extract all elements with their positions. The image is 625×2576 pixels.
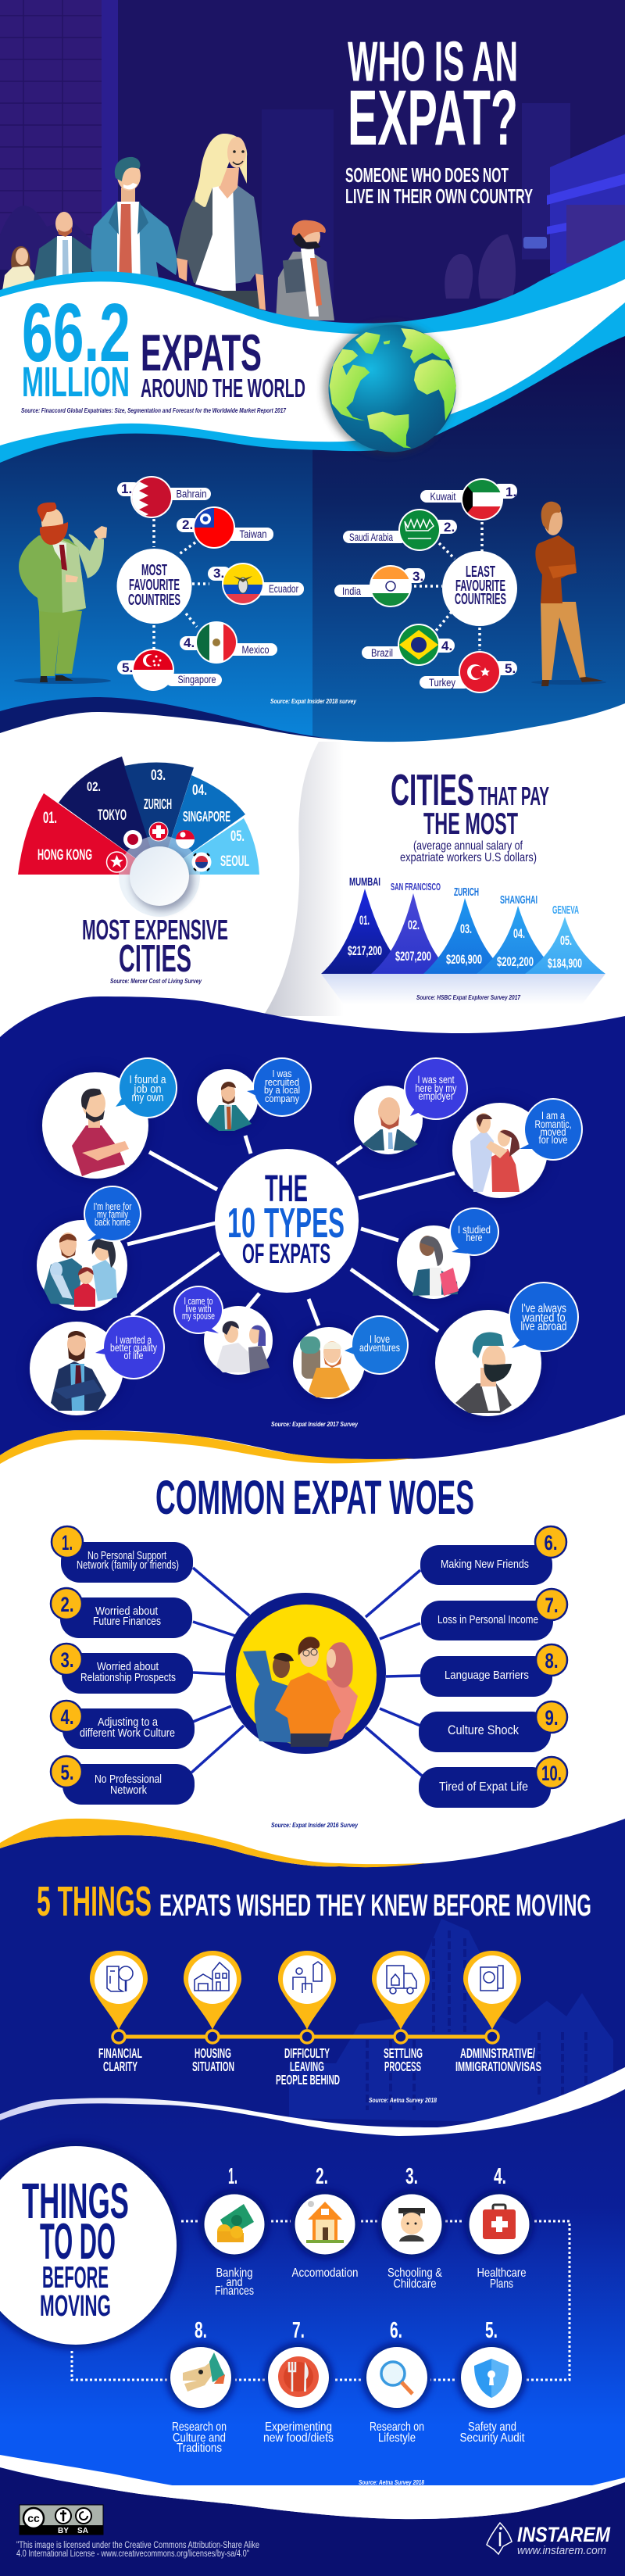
woe labels [77, 1550, 538, 1797]
country: Mexico: 4. [184, 635, 195, 650]
type: romantic [452, 1098, 583, 1198]
woe labels: No Personal Support [88, 1550, 166, 1562]
values: 02. [408, 918, 420, 932]
stat: 66.2 million expats [22, 287, 305, 406]
step labels: and [227, 2276, 242, 2289]
step numbers: 2. [316, 2164, 328, 2189]
woe labels: No Professional [95, 1773, 162, 1786]
type: sent by employer: I was sent [417, 1074, 455, 1086]
country: Taiwan [177, 506, 273, 549]
values: $184,900 [548, 956, 582, 971]
pin labels: IMMIGRATION/VISAS [455, 2059, 541, 2074]
pin labels: ADMINISTRATIVE/ [460, 2045, 535, 2061]
heading circle: COUNTRIES [128, 592, 180, 609]
section background: things to do [0, 2089, 625, 2485]
wave: yellow accent [0, 1430, 414, 1464]
type: recruited: I was [272, 1068, 292, 1079]
heading: 5 things [37, 1878, 591, 1925]
country: Saudi Arabia [343, 509, 457, 551]
country: Kuwait [420, 478, 517, 521]
pin: difficulty leaving people behind [278, 1951, 336, 2043]
source note: Source: Aetna Survey 2018 [369, 2097, 437, 2104]
country: India: India [342, 585, 361, 597]
wave: cyan band [0, 240, 625, 463]
labels [38, 767, 249, 870]
woe numbers: 7. [545, 1594, 558, 1617]
person: man in blue suit [91, 157, 177, 289]
centre dial [119, 835, 200, 917]
woe labels: Making New Friends [441, 1558, 529, 1571]
woe labels: Culture Shock [448, 1723, 519, 1737]
badge: creative commons: cc [27, 2512, 40, 2524]
type: recruited: recruited [265, 1076, 299, 1088]
timeline: 5 things [90, 1951, 541, 2088]
values: 03. [460, 921, 472, 936]
country: Ecuador [208, 563, 304, 605]
country: Turkey: 5. [505, 661, 516, 676]
country: Bahrain: 1. [121, 481, 132, 496]
pin: settling process [372, 1951, 430, 2043]
country: Ecuador: 3. [213, 566, 224, 581]
step numbers: 3. [405, 2164, 418, 2189]
labels: 04. [192, 782, 207, 799]
icon: house [306, 2201, 344, 2243]
flag: Hong Kong [106, 852, 127, 872]
type: family [37, 1186, 141, 1311]
country: Brazil [362, 624, 455, 666]
woe numbers: 2. [61, 1593, 73, 1616]
step labels: Banking [216, 2267, 253, 2280]
type: spouse: I came to [184, 1296, 213, 1307]
woe numbers: 10. [541, 1762, 562, 1785]
woe labels: Adjusting to a [98, 1716, 159, 1729]
logo: instarem [487, 2523, 610, 2557]
step numbers: 7. [292, 2318, 305, 2343]
country: Taiwan: Taiwan [239, 528, 267, 540]
woe labels: Loss in Personal Income [438, 1614, 538, 1626]
step labels: Research on [172, 2420, 227, 2434]
diagram: expat woes [51, 1526, 567, 1808]
person: man with folder [276, 220, 334, 320]
pin labels: CLARITY [103, 2059, 138, 2074]
woe numbers: 8. [545, 1649, 558, 1673]
pin: administrative [463, 1951, 521, 2043]
flag: Switzerland [149, 822, 168, 841]
type: better quality: better quality [110, 1342, 157, 1354]
labels: ZURICH [144, 796, 172, 812]
heading: 5 things: 5 THINGS [37, 1878, 152, 1925]
footer background [0, 2467, 625, 2576]
city names: ZURICH [454, 886, 479, 899]
source note: Source: Expat Insider 2016 Survey [271, 1822, 358, 1829]
type: studied [397, 1208, 499, 1299]
icon: first aid [483, 2205, 516, 2239]
step labels: Experimenting [265, 2420, 332, 2434]
chart: most expensive cities fan [18, 757, 259, 917]
stat: 66.2 million expats: EXPATS [141, 324, 262, 381]
woe numbers: 9. [545, 1706, 558, 1730]
step labels: Culture and [173, 2431, 226, 2445]
country: Brazil: Brazil [371, 647, 393, 659]
type: family: I'm here for [94, 1200, 132, 1212]
centre circle: TYPES [264, 1200, 345, 1247]
type: live abroad: wanted to [522, 1311, 566, 1325]
type: recruited: by a local [264, 1084, 300, 1096]
woe pills left [60, 1542, 195, 1805]
country: Singapore [117, 649, 222, 691]
city names: SHANGHAI [500, 893, 538, 907]
type: sent by employer: employer [419, 1090, 454, 1102]
heading: most expensive cities: MOST EXPENSIVE [82, 914, 228, 946]
country: Kuwait: 1. [505, 485, 516, 499]
person: bald man [34, 212, 91, 281]
step labels: Healthcare [477, 2267, 527, 2280]
values: 01. [359, 913, 370, 928]
heading circle: LEAST [466, 564, 495, 581]
section background: cities [0, 703, 625, 1047]
type: found a job: I found a [130, 1073, 166, 1086]
centre circle: 10 [227, 1200, 255, 1247]
woe numbers: 5. [61, 1761, 73, 1784]
pin labels: PROCESS [384, 2059, 421, 2074]
labels: TOKYO [98, 807, 127, 824]
title: who is an expat: SOMEONE WHO DOES NOT [345, 163, 509, 187]
icon: money [217, 2204, 254, 2242]
step labels: Childcare [394, 2277, 437, 2291]
values [348, 913, 582, 971]
type: studied: I studied [458, 1223, 491, 1236]
panel: things to do heading circle: THINGS [22, 2173, 129, 2229]
centre circle [215, 1149, 359, 1293]
country: Mexico [180, 621, 277, 664]
icon: plate and cutlery [278, 2356, 319, 2397]
woe labels: Network (family or friends) [77, 1559, 179, 1572]
badge: creative commons: BY [58, 2527, 69, 2535]
values: 04. [513, 926, 525, 941]
type: live abroad: I've always [521, 1302, 566, 1315]
step numbers: 4. [494, 2164, 506, 2189]
woe labels: Relationship Prospects [80, 1672, 176, 1684]
country: Bahrain: Bahrain [177, 488, 206, 500]
city names: MUMBAI [349, 875, 380, 889]
step labels: Schooling & [388, 2267, 442, 2280]
heading circle: FAVOURITE [129, 577, 180, 594]
pin labels: HOUSING [195, 2045, 231, 2061]
pin labels: LEAVING [290, 2059, 324, 2074]
step numbers: 1. [228, 2164, 238, 2189]
badge: creative commons: SA [77, 2527, 88, 2535]
woe numbers [61, 1531, 562, 1785]
license text: 4.0 International License - www.creativecommons.org/licenses/by-sa/4.0" [16, 2549, 249, 2559]
illustration: man in green suit [14, 503, 111, 684]
values: $202,200 [497, 954, 534, 969]
pin labels: PEOPLE BEHIND [276, 2072, 340, 2088]
country: Mexico: Mexico [242, 644, 269, 656]
icon: graduate [398, 2208, 425, 2241]
step numbers: 8. [195, 2318, 207, 2343]
dotted connector path [72, 2221, 570, 2380]
heading: cities that pay the most [391, 765, 549, 841]
type: better quality: I wanted a [116, 1334, 152, 1346]
pin labels: FINANCIAL [98, 2045, 142, 2061]
chart: salary peaks [321, 875, 605, 1004]
country: Bahrain [117, 476, 211, 520]
centre circle: THE [265, 1168, 308, 1210]
type: romantic: for love [539, 1134, 567, 1146]
wave: white band [0, 2067, 625, 2136]
section background: favourite countries [0, 336, 625, 742]
type: sent by employer: here by my [416, 1082, 457, 1094]
type: romantic: Romantic, [534, 1118, 572, 1130]
diagram: 10 types of expats [30, 1057, 583, 1418]
step labels: Traditions [177, 2442, 222, 2455]
stat: 66.2 million expats: 66.2 [22, 287, 130, 379]
pin labels: DIFFICULTY [284, 2045, 330, 2061]
license text: "This image is licensed under the Creative Commons Attribution-Share Alike [16, 2541, 259, 2550]
heading: most expensive cities [82, 914, 228, 980]
type: romantic: I am a [541, 1110, 565, 1122]
woe labels: different Work Culture [80, 1727, 175, 1740]
heading circle [117, 549, 192, 624]
heading: cities that pay the most: THE MOST [423, 807, 518, 841]
panel: most favourite countries [117, 476, 304, 691]
panel: things to do heading circle: BEFORE [42, 2261, 109, 2295]
source note: Source: Aetna Survey 2018 [359, 2479, 424, 2486]
step labels: new food/diets [263, 2431, 334, 2445]
values: $206,900 [446, 952, 482, 967]
stat: 66.2 million expats: AROUND THE WORLD [141, 374, 305, 402]
city names [349, 875, 579, 917]
icon: mask [183, 2352, 225, 2392]
type: romantic: moved [541, 1126, 566, 1138]
centre circle: OF EXPATS [242, 1239, 330, 1269]
icon: globe [323, 323, 456, 454]
country: Taiwan: 2. [182, 517, 193, 532]
woe labels: Future Finances [93, 1615, 161, 1628]
country: Turkey: Turkey [429, 677, 455, 689]
heading circle: FAVOURITE [455, 578, 505, 595]
pin labels: SITUATION [192, 2059, 234, 2074]
values: 05. [560, 933, 572, 948]
type: studied: here [466, 1231, 483, 1243]
country: India [334, 565, 425, 607]
stat: 66.2 million expats: MILLION [22, 359, 130, 406]
type: better quality: of life [123, 1350, 144, 1361]
section background: 5 things [0, 1819, 625, 2157]
step labels: Plans [490, 2277, 513, 2291]
heading: most expensive cities: CITIES [119, 938, 191, 980]
type: found a job [42, 1057, 177, 1179]
labels: SINGAPORE [183, 809, 230, 825]
country: Singapore: 5. [122, 660, 133, 675]
city names: GENEVA [552, 903, 579, 917]
labels: 03. [151, 767, 166, 784]
title: who is an expat [345, 30, 533, 208]
panel: things to do heading circle: TO DO [40, 2213, 116, 2270]
section background: 10 types [0, 996, 625, 1459]
centre illustration [225, 1593, 386, 1754]
illustration: man in brown shirt [531, 502, 606, 686]
license text [16, 2541, 259, 2559]
icon: magnifier [381, 2362, 412, 2394]
woe numbers: 1. [62, 1531, 73, 1555]
country: Ecuador: Ecuador [269, 583, 298, 595]
type: adventures: adventures [359, 1341, 400, 1354]
type: spouse [173, 1286, 273, 1375]
subheading [400, 839, 537, 864]
steps: things to do [167, 2164, 533, 2455]
type: recruited [197, 1057, 312, 1131]
type: family: back home [95, 1216, 130, 1228]
type: better quality [30, 1315, 165, 1415]
heading circle [442, 551, 517, 626]
step labels: Finances [215, 2284, 254, 2298]
type: adventures [293, 1315, 409, 1399]
values: $207,200 [395, 949, 431, 964]
woe labels: Network [110, 1784, 148, 1797]
pin labels [98, 2045, 541, 2088]
panel: things to do heading circle: MOVING [40, 2290, 111, 2323]
type: recruited: company [265, 1093, 299, 1104]
type: spouse: my spouse [182, 1311, 215, 1322]
step labels: Accomodation [292, 2267, 358, 2280]
type: live abroad: live abroad [520, 1320, 567, 1333]
values: $217,200 [348, 943, 382, 958]
source note: Source: Mercer Cost of Living Survey [110, 978, 202, 985]
source note: Source: HSBC Expat Explorer Survey 2017 [416, 994, 520, 1001]
labels: 01. [43, 809, 57, 827]
step numbers: 5. [485, 2318, 498, 2343]
logo: instarem: www.instarem.com [517, 2544, 606, 2557]
country: Brazil: 4. [441, 639, 452, 653]
wave: white band [0, 279, 625, 445]
city names: SAN FRANCISCO [391, 881, 441, 893]
heading: cities that pay the most: CITIES [391, 765, 474, 815]
subheading: (average annual salary of [413, 839, 523, 853]
woe badges [51, 1526, 567, 1788]
woe labels: Language Barriers [445, 1669, 529, 1682]
hero background city [0, 0, 625, 360]
step labels [172, 2267, 527, 2455]
type: live abroad [435, 1282, 579, 1416]
heading: cities that pay the most: THAT PAY [478, 782, 549, 810]
pin: housing situation [184, 1951, 241, 2043]
heading circle: MOST [141, 562, 167, 579]
type: spouse: live with [186, 1304, 212, 1315]
step numbers: 6. [390, 2318, 402, 2343]
person: blonde woman [177, 134, 266, 322]
country: Kuwait: Kuwait [430, 491, 456, 503]
labels: 05. [230, 828, 245, 845]
subheading: expatriate workers U.S dollars) [400, 851, 537, 864]
flag: Japan [123, 830, 142, 849]
woe pills right [419, 1545, 553, 1808]
badge: creative commons [20, 2505, 103, 2535]
flag: Singapore [176, 830, 195, 849]
step labels: Research on [370, 2420, 424, 2434]
woe numbers: 6. [544, 1531, 558, 1555]
labels: SEOUL [220, 853, 249, 870]
woe labels: Worried about [95, 1605, 158, 1618]
wave: yellow accent [0, 1819, 426, 1867]
wave: white band [0, 2455, 625, 2519]
pin: financial clarity [90, 1951, 148, 2043]
pin labels: SETTLING [384, 2045, 423, 2061]
panel: things to do heading circle [0, 2142, 180, 2349]
step labels: Safety and [468, 2420, 516, 2434]
step labels: Lifestyle [378, 2431, 416, 2445]
woe numbers: 3. [61, 1648, 73, 1672]
type: found a job: my own [131, 1091, 164, 1104]
person: small woman [2, 246, 34, 291]
country: Saudi Arabia: 2. [444, 520, 455, 535]
type: found a job: job on [134, 1082, 161, 1096]
source note: Source: Finaccord Global Expatriates: Size, Segmentation and Forecast for the Worldwide Market Report 2017 [21, 407, 286, 414]
country: India: 3. [412, 569, 423, 584]
country: Singapore: Singapore [178, 674, 216, 685]
flag: South Korea [192, 852, 211, 872]
country: Turkey [420, 651, 517, 693]
illustration: background buildings [289, 1919, 613, 2122]
type: adventures: I love [370, 1333, 390, 1345]
source note: Source: Expat Insider 2018 survey [270, 698, 356, 705]
heading circle: COUNTRIES [455, 591, 506, 608]
labels: HONG KONG [38, 847, 92, 864]
illustration: group of expats [2, 134, 334, 322]
woe labels: Tired of Expat Life [439, 1780, 528, 1794]
logo: instarem: INSTAREM [517, 2523, 610, 2546]
labels: 02. [87, 779, 101, 794]
wave: navy rim [0, 697, 367, 744]
icon: shield [474, 2359, 509, 2398]
step numbers [195, 2164, 506, 2343]
step labels: Security Audit [459, 2431, 525, 2445]
panel: least favourite countries [334, 478, 517, 693]
woe labels: Worried about [97, 1661, 159, 1673]
type: sent by employer [354, 1057, 468, 1154]
type: family: my family [97, 1208, 128, 1220]
source note: Source: Expat Insider 2017 Survey [271, 1421, 358, 1428]
country: Saudi Arabia: Saudi Arabia [349, 531, 393, 543]
woe numbers: 4. [61, 1705, 73, 1729]
